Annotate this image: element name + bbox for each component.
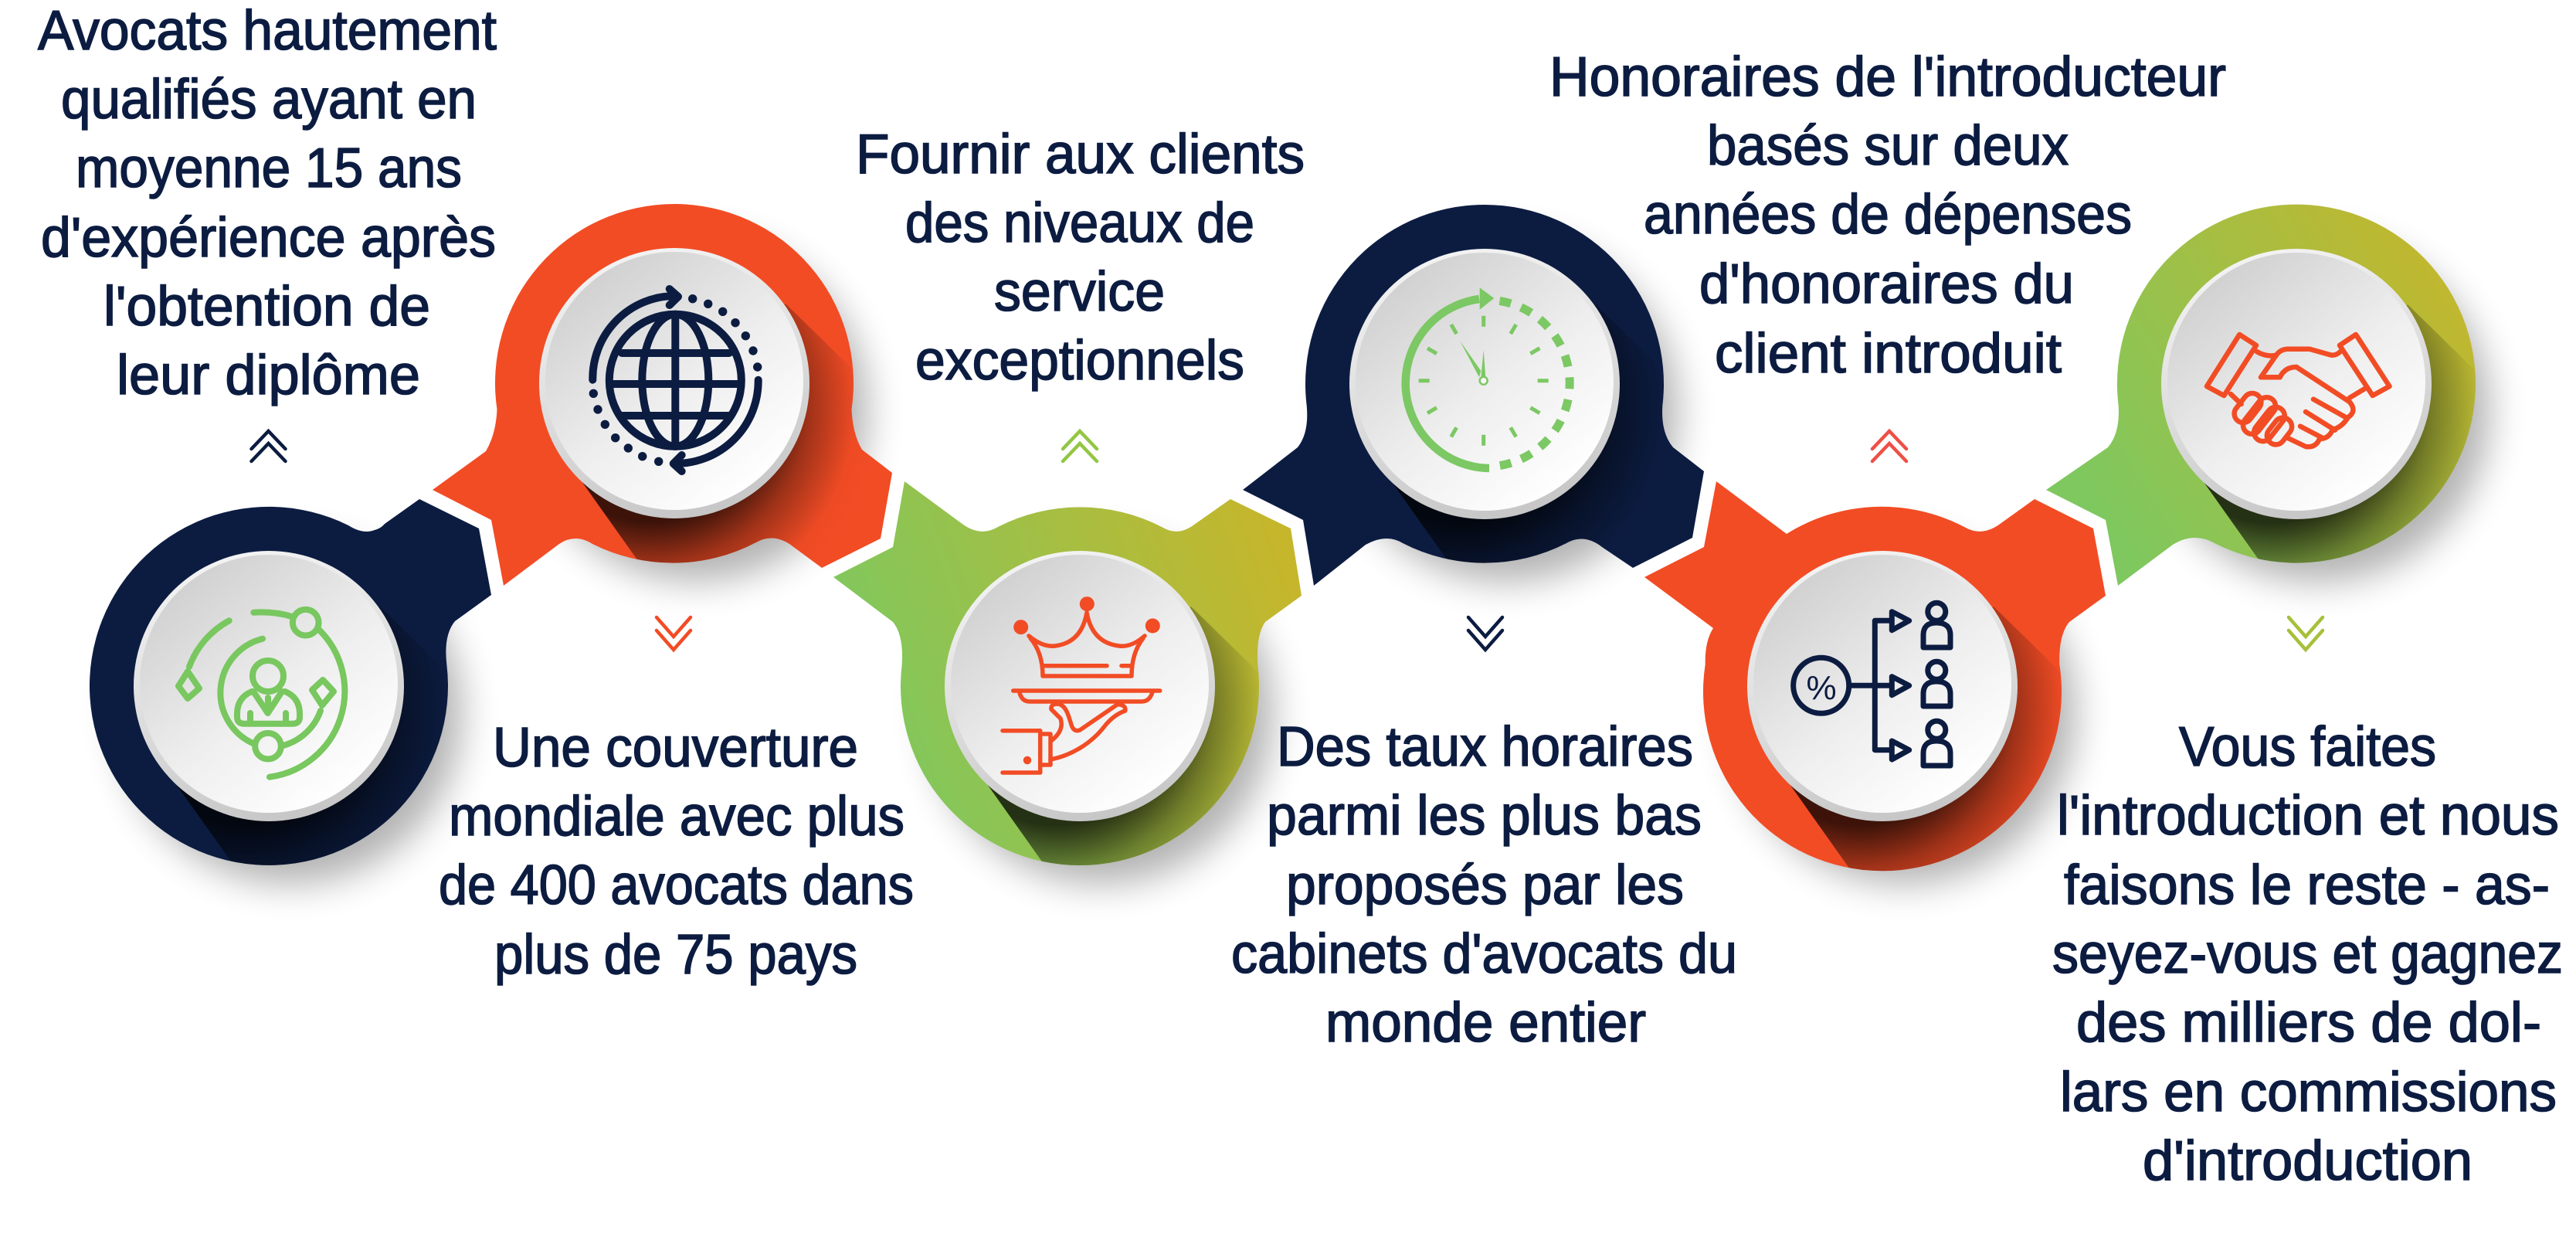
text: step 1: qualifiés ayant en bbox=[61, 69, 477, 131]
soft drop shadows bbox=[119, 238, 2489, 884]
text: step 1 bbox=[38, 0, 497, 406]
text: step 3: exceptionnels bbox=[915, 330, 1244, 392]
text: step 5: d'honoraires du bbox=[1699, 253, 2074, 315]
icon: person in orbit bbox=[178, 610, 344, 777]
text: step 1: moyenne 15 ans bbox=[76, 138, 462, 199]
text: step 6: lars en commissions bbox=[2060, 1062, 2557, 1123]
text: step 3: service bbox=[994, 261, 1165, 323]
chevrons up: step 5 bbox=[1872, 431, 1906, 461]
text: step 6: Vous faites bbox=[2179, 716, 2436, 778]
text: step 1: Avocats hautement bbox=[38, 0, 497, 62]
icon: clock bbox=[1406, 287, 1570, 468]
text: step 4: parmi les plus bas bbox=[1267, 785, 1702, 847]
step 6: green badge bbox=[2046, 204, 2476, 586]
text: step 4: monde entier bbox=[1325, 992, 1646, 1054]
text: step 1: d'expérience après bbox=[41, 207, 496, 269]
text: step 3 bbox=[856, 124, 1305, 392]
text: step 6: l'introduction et nous bbox=[2057, 785, 2559, 847]
icon: handshake bbox=[2207, 335, 2390, 448]
icon: percentage split to three people: % bbox=[1806, 669, 1837, 707]
text: step 1: leur diplôme bbox=[117, 345, 420, 406]
text: step 3: des niveaux de bbox=[905, 192, 1254, 254]
text: step 6 bbox=[2052, 716, 2563, 1192]
text: step 6: d'introduction bbox=[2143, 1130, 2472, 1192]
text: step 6: faisons le reste - as- bbox=[2064, 855, 2550, 916]
text: step 4: proposés par les bbox=[1286, 855, 1684, 916]
text: step 5: années de dépenses bbox=[1644, 184, 2132, 246]
text: step 5: Honoraires de l'introducteur bbox=[1549, 46, 2226, 108]
icon: globe with arrows bbox=[589, 289, 762, 471]
text: step 6: des milliers de dol- bbox=[2076, 992, 2541, 1054]
step 4: navy badge bbox=[1243, 205, 1704, 586]
text: step 2: Une couverture bbox=[493, 717, 858, 779]
chevrons down: step 4 bbox=[1468, 617, 1502, 650]
text: step 2: plus de 75 pays bbox=[494, 924, 857, 986]
step 5: orange badge bbox=[1644, 481, 2106, 872]
text: step 5 bbox=[1549, 46, 2226, 385]
text: step 2: mondiale avec plus bbox=[449, 786, 904, 848]
step 3: green badge bbox=[833, 481, 1302, 865]
icon: crown on a tray bbox=[1003, 596, 1160, 773]
step 2: orange badge bbox=[433, 204, 892, 586]
text: step 4: Des taux horaires bbox=[1277, 716, 1693, 778]
text: step 4: cabinets d'avocats du bbox=[1231, 923, 1737, 985]
chevrons up: step 3 bbox=[1063, 431, 1097, 461]
chevrons down: step 6 bbox=[2289, 617, 2323, 650]
step 1: navy badge bbox=[90, 499, 491, 865]
chevrons up: step 1 bbox=[252, 431, 286, 461]
text: step 4 bbox=[1231, 716, 1737, 1054]
text: step 5: basés sur deux bbox=[1707, 115, 2069, 177]
text: step 2: de 400 avocats dans bbox=[439, 855, 914, 916]
text: step 3: Fournir aux clients bbox=[856, 124, 1305, 185]
chevrons down: step 2 bbox=[657, 617, 691, 650]
text: step 5: client introduit bbox=[1715, 323, 2062, 385]
text: step 1: l'obtention de bbox=[104, 276, 430, 338]
icon: percentage split to three people bbox=[1794, 603, 1950, 766]
text: step 2 bbox=[439, 717, 914, 986]
